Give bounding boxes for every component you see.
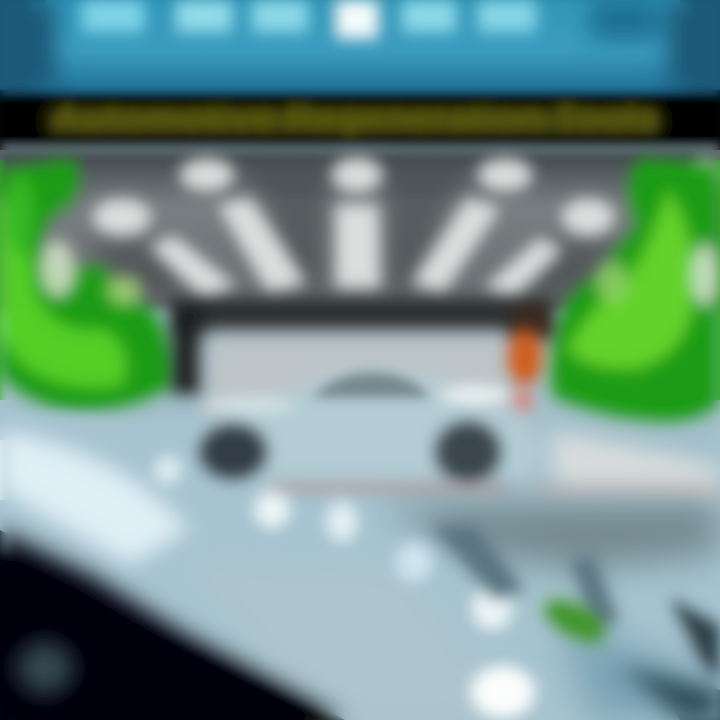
garage opening (172, 298, 552, 420)
car highlight (440, 386, 510, 404)
icon: green floor marker (537, 591, 613, 651)
ceiling with radiating lights (0, 150, 720, 310)
car side highlight (205, 397, 295, 413)
floor marker lights (154, 456, 720, 718)
panel: right green foliage (550, 158, 720, 422)
orange warning light (507, 330, 543, 386)
title band (0, 92, 720, 148)
car window (312, 372, 430, 398)
header band: blue skylight (0, 0, 720, 92)
panel: left green foliage (0, 158, 174, 412)
icon: dim corner circle (17, 642, 73, 694)
title: Automotive Regeneration Tools (53, 96, 659, 137)
rear wheel (435, 421, 501, 483)
car (195, 370, 543, 483)
dark tyre streaks (430, 525, 720, 680)
front wheel (199, 424, 267, 480)
floor (0, 410, 720, 720)
dark corner (0, 530, 720, 720)
